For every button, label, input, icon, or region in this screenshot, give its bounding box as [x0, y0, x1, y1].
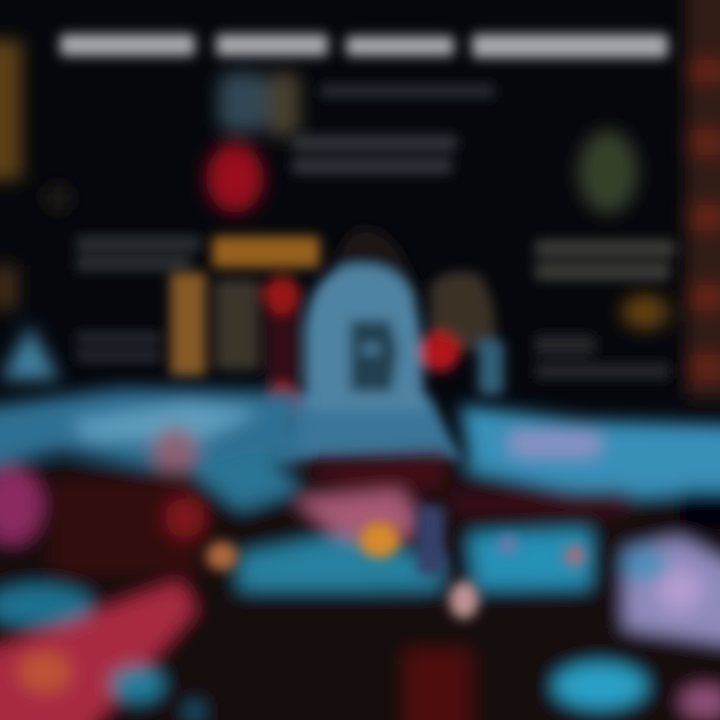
right blue band [460, 405, 720, 498]
dark platform [200, 587, 600, 720]
right lilac highlight pink [658, 568, 702, 612]
blurred text blocks [60, 34, 675, 379]
blue tombstone [305, 265, 425, 410]
right teal block [470, 530, 590, 625]
right lilac block [625, 538, 720, 645]
centre red patch [165, 498, 205, 538]
pink spot mid [498, 535, 518, 555]
centre blue wedge [190, 450, 300, 510]
centre teal block [240, 535, 440, 590]
far right dark patch [680, 490, 720, 530]
glyph highlight [362, 345, 380, 353]
red node lower [266, 383, 300, 417]
right green shape [578, 130, 638, 214]
platform red accent [405, 650, 470, 720]
right lilac teal fleck [623, 549, 667, 581]
lower teal pool [111, 667, 163, 701]
central monument scene [170, 228, 504, 462]
blue right arch [478, 340, 504, 395]
title [60, 34, 668, 58]
right upper dark band [450, 490, 630, 516]
brown right arch [430, 272, 495, 350]
right text block lower [535, 335, 670, 379]
bright highlights [206, 505, 586, 619]
red node right [420, 332, 460, 372]
bottom right pink patch [681, 686, 720, 718]
left-side tan speck [44, 184, 72, 212]
dark red column [265, 310, 300, 382]
orange glow left [206, 541, 238, 571]
left text block lower [76, 332, 161, 362]
right text block upper [535, 240, 675, 280]
lower scene: water, coloured blocks and reflections [0, 388, 720, 720]
pale glow [449, 581, 479, 619]
left orange strip [0, 40, 22, 180]
upper scene: headings, text blocks and side decoration [0, 0, 720, 400]
centre pink patch [295, 490, 425, 545]
arch outline [330, 228, 420, 300]
left lower orange patch [0, 265, 18, 310]
pink spot right [564, 545, 586, 567]
orange glow centre [360, 522, 400, 558]
left pink patch [0, 467, 42, 543]
red circle icon [206, 143, 264, 213]
dark lower backdrop [0, 465, 720, 720]
top centre tan shape [268, 72, 300, 137]
centre left pink patch [153, 428, 197, 472]
left text block upper [76, 236, 201, 271]
right lilac highlight [510, 432, 600, 456]
lower left red wedge [0, 582, 195, 720]
red node upper [263, 276, 301, 314]
right brick column [685, 0, 720, 400]
tombstone inner glyph [350, 320, 398, 392]
left blue pool [0, 586, 92, 626]
right orange accent [621, 294, 669, 330]
lower left orange glow [19, 652, 71, 692]
tombstone base [270, 395, 462, 462]
right teal pool [554, 664, 646, 708]
top centre bluish shape [218, 72, 268, 132]
left blue band [0, 388, 300, 470]
grey column [215, 280, 259, 370]
left blue triangle [0, 325, 60, 380]
bottom blue pool [186, 698, 270, 720]
brick highlights [690, 60, 720, 380]
orange column [170, 272, 206, 376]
centre dark red wedge [300, 455, 450, 490]
left band highlight [70, 402, 260, 440]
left dark red mass [50, 478, 200, 576]
orange header bar [212, 236, 320, 268]
central text block [292, 135, 457, 174]
violet pillar [417, 505, 445, 575]
subtitle [320, 84, 495, 98]
